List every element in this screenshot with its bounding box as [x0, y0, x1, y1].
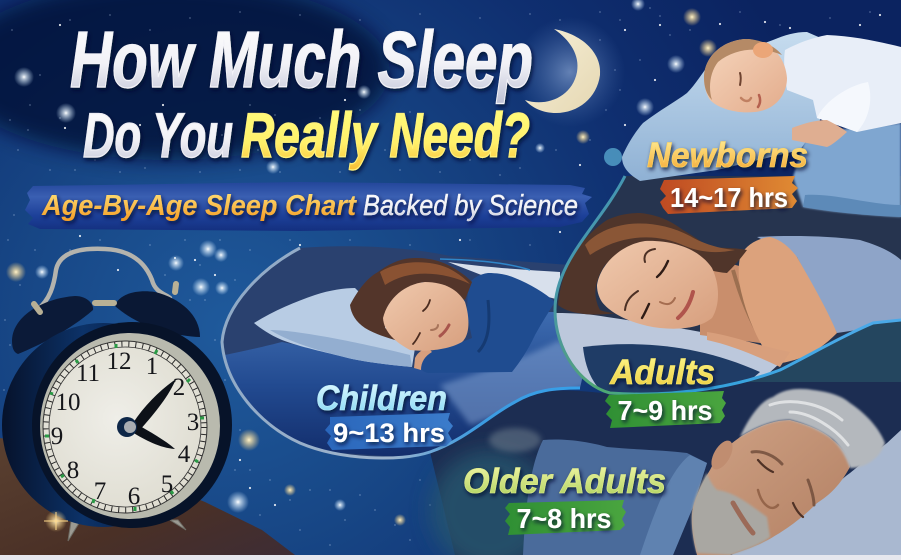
clock minute track: [46, 344, 204, 510]
glowing stars: [6, 0, 717, 526]
man's face: [692, 420, 850, 555]
label: adults: Adults: [609, 353, 715, 392]
panel: children sleeping: [220, 246, 582, 460]
woman's neck and chest: [700, 264, 761, 344]
bottom strip: [0, 555, 901, 560]
child's closed eyes, nose and lips: [413, 300, 449, 344]
clock handle: [37, 249, 170, 310]
man's blanket: [523, 439, 707, 555]
clock feet: [68, 515, 186, 541]
clock numerals: 7: [94, 478, 106, 505]
clock numerals: 6: [128, 483, 140, 510]
man's ear: [707, 437, 737, 473]
clock bell left: [12, 296, 93, 354]
child's blue sweater: [420, 273, 555, 373]
baby's head: [704, 39, 787, 112]
baby's closed eye, nose and mouth: [740, 73, 760, 107]
clock numerals: 8: [67, 457, 79, 484]
label: adults: [605, 353, 726, 428]
baby's hand: [792, 120, 847, 147]
subtitle banner: [25, 182, 592, 231]
label: older adults: Older Adults: [463, 462, 666, 501]
label: children: Children: [316, 379, 447, 418]
clock numerals: 9: [51, 423, 63, 450]
clock centre pin: [117, 417, 137, 437]
panel: adults sleeping: [550, 170, 901, 400]
clock numerals: [51, 348, 199, 510]
badge: 7~8 hrs: 7~8 hrs: [516, 503, 612, 534]
woman's face: [597, 241, 718, 329]
child's face: [383, 282, 468, 351]
clock bell right: [115, 291, 200, 337]
label: children: [316, 379, 453, 450]
woman's hair: [558, 213, 747, 314]
clock hour ticks: [45, 344, 204, 511]
clock hands: [132, 379, 176, 449]
label: newborns: Newborns: [647, 136, 808, 175]
title: How Much Sleep: [70, 15, 533, 104]
clock front ring: [32, 322, 232, 528]
woman's shoulder and arm: [739, 237, 837, 363]
clock knobs and hammer: [34, 284, 176, 312]
panel: newborns sleeping: [622, 32, 901, 217]
clock numerals: 4: [178, 441, 191, 468]
title: Do You: [83, 101, 233, 171]
woman's pillow: [556, 313, 778, 386]
child's pillow: [254, 288, 415, 367]
badge: 9~13 hrs: 9~13 hrs: [333, 418, 445, 448]
clock numerals: 2: [173, 374, 185, 401]
baby's ear: [753, 42, 773, 58]
badge: 14~17 hrs: 14~17 hrs: [670, 182, 788, 213]
woman's top: [757, 236, 901, 333]
subtitle text: Age-By-Age Sleep Chart: [41, 190, 357, 222]
clock numerals: 1: [146, 353, 158, 380]
badge: 7~9 hrs: 7~9 hrs: [618, 395, 712, 426]
icon: crescent moon: [515, 17, 625, 127]
clock numerals: 3: [187, 409, 199, 436]
clock numerals: 10: [56, 389, 80, 416]
clock face: [43, 341, 207, 513]
child's hand: [414, 348, 432, 370]
clock numerals: 11: [76, 360, 100, 387]
subtitle text: Backed by Science: [363, 190, 578, 222]
title: Really Need?: [241, 101, 530, 171]
title: [70, 15, 533, 171]
baby's blanket: [793, 123, 901, 217]
child's hair: [350, 258, 472, 345]
man's pillow: [730, 430, 901, 556]
label: older adults: [463, 462, 666, 535]
icon: alarm clock: [2, 249, 232, 541]
woman's closed eyes, brows, nose and lips: [625, 249, 693, 318]
man's closed eyes, nose and mouth: [733, 452, 814, 533]
panel: older adults sleeping: [430, 320, 901, 560]
man's grey hair: [740, 389, 885, 468]
subtitle text: [41, 190, 578, 222]
clock body: [2, 323, 204, 527]
man's grey beard: [692, 473, 770, 555]
clock numerals: 5: [161, 471, 173, 498]
label: newborns: [647, 136, 808, 214]
baby's white onesie: [784, 35, 901, 132]
baby's pillow: [622, 32, 830, 181]
wooden table: [0, 438, 295, 555]
table sparkle: [44, 510, 68, 532]
clock numerals: 12: [106, 348, 132, 375]
child's back pillow: [448, 262, 560, 300]
